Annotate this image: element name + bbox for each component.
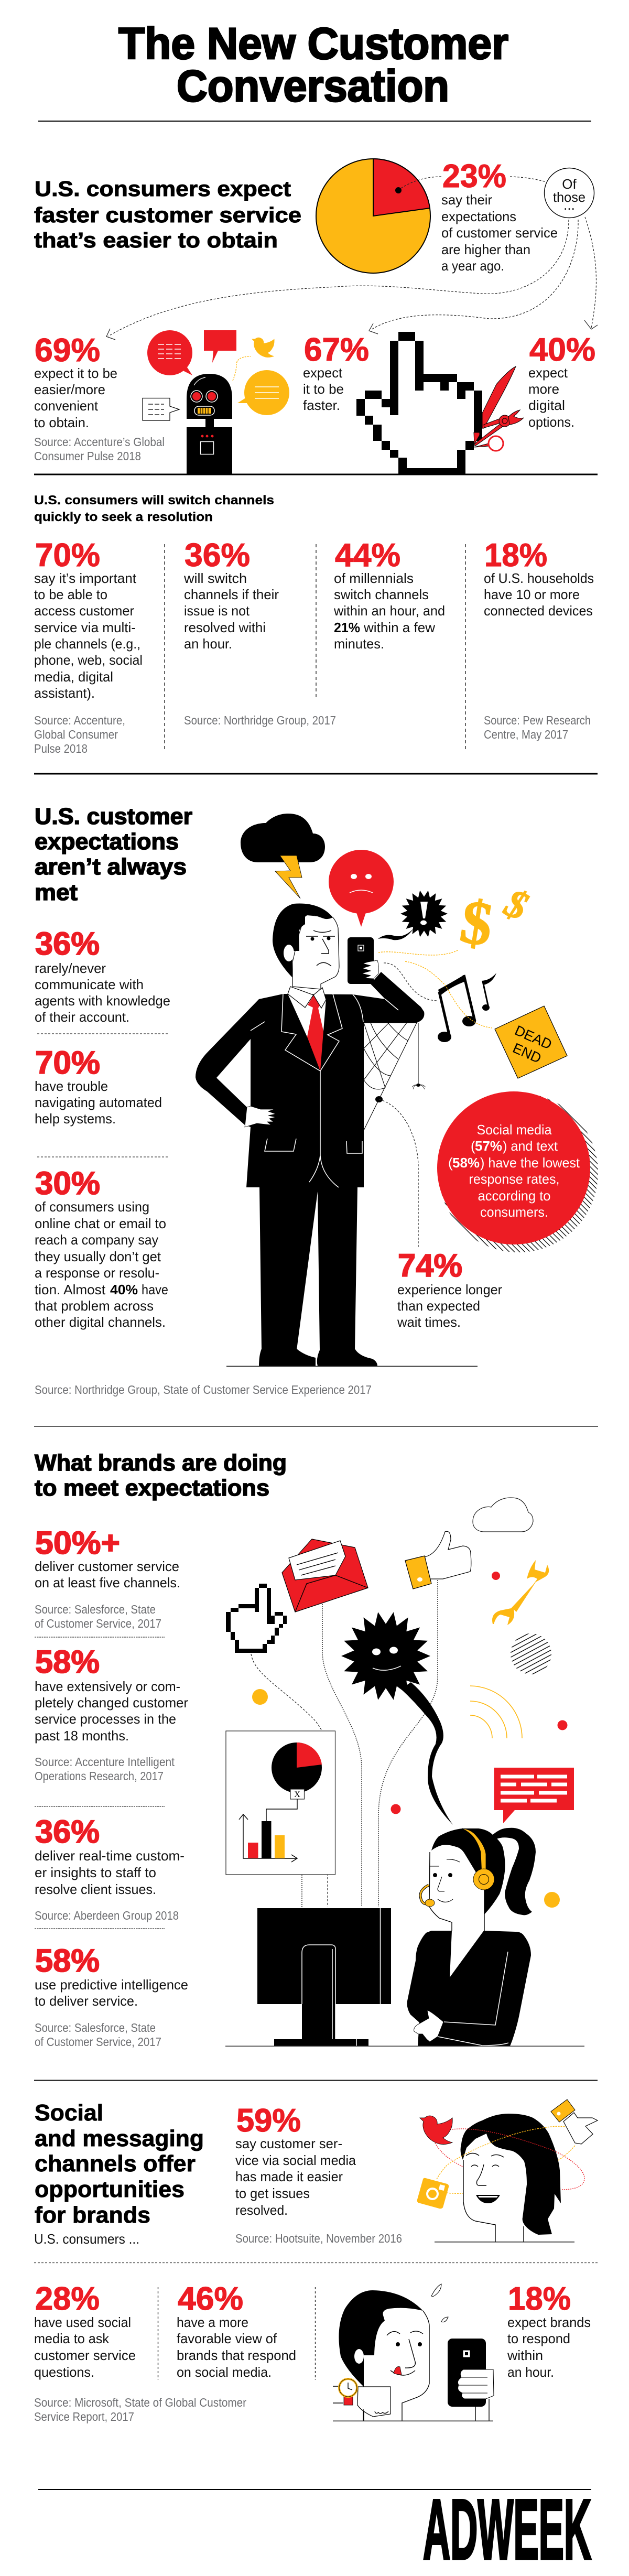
source: Northridge: Source: Northridge Group, State of Customer Service Experience 2017: [35, 1383, 372, 1397]
stat: 18 percent respond: [507, 2281, 591, 2380]
stat: 70 percent: service via multi-: [34, 620, 136, 635]
stat: 70 percent: [34, 537, 143, 755]
stat: 30 percent chat: they usually don’t get: [35, 1249, 161, 1264]
stat: 59 percent: to get issues: [235, 2185, 310, 2201]
stat: 69 percent: to obtain.: [34, 415, 89, 430]
callout: social media response rates: Social media: [477, 1122, 552, 1138]
title: The New Customer: [118, 19, 508, 68]
stat: 18 percent respond: within: [507, 2347, 543, 2363]
illustration: angry businessman: [196, 904, 424, 1366]
heading: social opportunities: U.S. consumers ...: [34, 2231, 139, 2247]
stat: 36 percent insights: deliver real-time custom-: [35, 1848, 185, 1864]
icon: outlined cloud: [473, 1498, 533, 1532]
stat: 30 percent chat: tion. Almost: [35, 1282, 106, 1297]
stat: 69 percent: convenient: [34, 398, 99, 414]
stat: 50 percent plus: of Customer Service, 2017: [35, 1617, 161, 1630]
stat: 58 percent predictive: use predictive intelligence: [35, 1977, 188, 1993]
stat: 59 percent: [235, 2103, 402, 2245]
stat: 18 percent: 18%: [484, 537, 547, 573]
callout: social media response rates: (: [448, 1155, 453, 1171]
chart card: pie and bars: X: [294, 1790, 300, 1799]
stat: 30 percent chat: of consumers using: [35, 1199, 149, 1215]
stat: 36 percent: issue is not: [184, 603, 250, 619]
stat: 44 percent: 44%: [335, 537, 400, 573]
icon: envelope: [282, 1539, 368, 1612]
stat: 58 percent changed: [35, 1644, 188, 1783]
callout: social media response rates: [437, 1091, 598, 1252]
heading: social opportunities: [34, 2100, 204, 2247]
icon: music notes: [438, 973, 496, 1042]
stat: 46 percent: have a more: [177, 2314, 248, 2330]
icon: pixel cursor hand: [356, 332, 482, 474]
stat: 36 percent insights: resolve client issues.: [35, 1881, 156, 1897]
stat: 70 percent: Global Consumer: [34, 728, 118, 741]
title: Conversation: [177, 61, 449, 111]
stat: 74 percent: than expected: [397, 1298, 480, 1314]
stat: 36 percent: [183, 537, 336, 727]
stat: 46 percent: [177, 2281, 296, 2380]
heading: social opportunities: channels offer: [35, 2151, 196, 2177]
stat: 40 percent: digital: [528, 397, 565, 413]
arrows: dotted illustration links: [378, 950, 492, 1028]
icon: phone in hand: [348, 937, 379, 984]
heading: switch channels: [34, 493, 274, 524]
stat: 23 percent: [441, 158, 558, 274]
stat: 36 percent rarely: rarely/never: [35, 960, 106, 976]
stat: 50 percent plus: deliver customer service: [35, 1558, 179, 1574]
stat: 40 percent: options.: [528, 414, 574, 430]
stat: 46 percent: favorable view of: [177, 2331, 277, 2346]
stat: 30 percent chat: reach a company say: [35, 1232, 158, 1248]
stat: 36 percent rarely: agents with knowledge: [35, 993, 170, 1009]
stat: 70 percent: access customer: [34, 603, 134, 619]
stat: 58 percent predictive: Source: Salesforce, State: [35, 2021, 156, 2034]
stat: 18 percent respond: to respond: [507, 2331, 570, 2346]
source: Microsoft: Source: Microsoft, State of Global Customer: [34, 2396, 246, 2409]
callout: social media response rates: ) and text: [503, 1138, 558, 1154]
panel: expectations not met: [35, 804, 598, 1397]
heading: faster customer service: faster customer service: [34, 203, 301, 227]
callout: of those: Of: [562, 176, 577, 192]
stat: 44 percent: 21%: [334, 620, 360, 635]
stat: 30 percent chat: have: [142, 1282, 168, 1297]
icon: smiling burst: [341, 1612, 453, 1825]
stat: 36 percent: resolved withi: [184, 620, 266, 635]
stat: 44 percent: [333, 537, 445, 652]
stat: 50 percent plus: [35, 1525, 180, 1630]
stat: 67 percent: it to be: [303, 381, 344, 397]
icon: wrench: [492, 1560, 549, 1625]
headset: [462, 1828, 486, 1875]
stat: 58 percent changed: Operations Research, 2017: [35, 1769, 164, 1783]
stat: 44 percent: minutes.: [334, 636, 384, 652]
features: [429, 1859, 460, 1902]
stat: 70 percent: to be able to: [34, 587, 107, 602]
stat: 59 percent: vice via social media: [235, 2152, 356, 2168]
icon: robot with speech bubbles: [143, 330, 289, 474]
stat: 28 percent: customer service: [34, 2347, 136, 2363]
stat: 58 percent predictive: of Customer Service, 2017: [35, 2035, 161, 2049]
arrows: dotted links to monitor: [251, 1580, 438, 1907]
illustration: man checking watch and phone: [333, 2284, 494, 2421]
stat: 59 percent: Source: Hootsuite, November 2016: [235, 2232, 402, 2245]
stat: 67 percent: expect: [303, 365, 343, 381]
stat: 18 percent: Centre, May 2017: [484, 728, 568, 741]
stat: 30 percent chat: a response or resolu-: [35, 1265, 159, 1281]
panel: what brands are doing: [35, 1450, 584, 2049]
icon: red speech bubble with lines: [494, 1768, 574, 1823]
hip hand: [245, 1106, 276, 1127]
stat: 44 percent: within an hour, and: [333, 603, 445, 619]
stat: 74 percent: experience longer: [397, 1282, 502, 1297]
stat: 28 percent: have used social: [34, 2314, 131, 2330]
stat: 70 percent: 70%: [35, 537, 100, 573]
stat: 70 percent: Source: Accenture,: [34, 713, 125, 727]
stat: 58 percent changed: Source: Accenture Intelligent: [35, 1755, 175, 1769]
stat: 59 percent: resolved.: [235, 2202, 288, 2218]
hair: [431, 1828, 505, 1914]
stat: 58 percent changed: have extensively or com-: [35, 1679, 180, 1694]
stat: 44 percent: within a few: [363, 620, 435, 635]
icon: dead end sign: [495, 1006, 567, 1078]
icon: sad face speech bubble: [329, 850, 394, 927]
stat: 50 percent plus: on at least five channels.: [35, 1575, 180, 1590]
stat: 58 percent changed: service processes in the: [35, 1711, 176, 1727]
stat: 70 percent trouble: 70%: [35, 1045, 100, 1080]
stat: 69 percent: [34, 332, 165, 463]
face: [429, 1840, 484, 1931]
stat: 23 percent: 23%: [442, 158, 506, 194]
arrows: dashed connectors: [106, 177, 598, 340]
stat: 18 percent: have 10 or more: [484, 587, 580, 602]
pie chart: 23 percent: [316, 159, 430, 273]
icon: spider web: [364, 1023, 426, 1248]
heading: expectations not met: expectations: [35, 829, 179, 854]
stat: 69 percent: Consumer Pulse 2018: [34, 449, 141, 463]
callout: social media response rates: (: [471, 1138, 475, 1154]
source: Microsoft: Service Report, 2017: [34, 2410, 134, 2423]
stat: 40 percent: more: [528, 381, 559, 397]
stat: 58 percent changed: pletely changed customer: [35, 1695, 188, 1711]
stat: 67 percent: [303, 332, 369, 413]
stat: 69 percent: 69%: [35, 332, 100, 369]
stat: 36 percent insights: [35, 1814, 185, 1922]
stat: 36 percent: Source: Northridge Group, 2017: [184, 713, 336, 727]
stat: 69 percent: expect it to be: [34, 365, 117, 381]
stat: 70 percent: media, digital: [34, 669, 113, 685]
stat: 58 percent predictive: 58%: [35, 1943, 100, 1978]
icon: thumbs up: [405, 1531, 471, 1589]
stat: 36 percent: channels if their: [184, 587, 279, 602]
stat: 69 percent: Source: Accenture’s Global: [34, 435, 165, 449]
stat: 58 percent changed: 58%: [35, 1644, 100, 1680]
stat: 74 percent: 74%: [398, 1248, 462, 1283]
stat: 28 percent: questions.: [34, 2364, 94, 2380]
icon: small pixel hand: [226, 1584, 287, 1653]
stat: 70 percent: Pulse 2018: [34, 742, 88, 755]
callout: social media response rates: 57%: [475, 1138, 502, 1154]
heading: expectations not met: [35, 804, 192, 905]
stat: 23 percent: expectations: [441, 209, 516, 224]
stat: 59 percent: say customer ser-: [235, 2136, 342, 2151]
stat: 18 percent respond: an hour.: [507, 2364, 554, 2380]
stat: 50 percent plus: Source: Salesforce, State: [35, 1603, 156, 1616]
stat: 74 percent: [397, 1248, 502, 1330]
callout: of those: [544, 168, 594, 218]
stat: 28 percent: [34, 2281, 136, 2380]
panel: social and messaging: [34, 2099, 598, 2423]
stat: 30 percent chat: other digital channels.: [35, 1314, 166, 1330]
stat: 36 percent rarely: 36%: [35, 926, 100, 961]
icon: dead end sign: DEAD: [513, 1022, 554, 1053]
stat: 36 percent rarely: communicate with: [35, 977, 144, 992]
heading: social opportunities: and messaging: [35, 2126, 204, 2151]
callout: of those: those: [553, 189, 585, 205]
stat: 23 percent: of customer service: [441, 225, 558, 241]
stat: 36 percent rarely: of their account.: [35, 1009, 129, 1025]
stat: 36 percent insights: Source: Aberdeen Group 2018: [35, 1909, 179, 1922]
stat: 70 percent trouble: help systems.: [35, 1111, 116, 1127]
stat: 36 percent insights: 36%: [35, 1814, 100, 1849]
stat: 70 percent trouble: have trouble: [35, 1078, 108, 1094]
shirt and tie: [288, 994, 326, 1037]
stat: 30 percent chat: 40%: [110, 1282, 138, 1297]
heading: social opportunities: Social: [35, 2100, 103, 2126]
heading: faster customer service: that’s easier to obtain: [34, 228, 278, 252]
jacket: [196, 972, 424, 1187]
stat: 50 percent plus: 50%+: [35, 1525, 120, 1561]
stat: 36 percent: an hour.: [184, 636, 232, 652]
heading: what brands are doing: What brands are doing: [35, 1450, 287, 1476]
hand: [414, 2010, 443, 2042]
stat: 18 percent respond: expect brands: [507, 2314, 591, 2330]
stat: 70 percent trouble: [35, 1045, 162, 1127]
body: [407, 1931, 531, 2046]
stat: 18 percent: [484, 537, 594, 741]
icon: desktop monitor: [257, 1908, 391, 2046]
heading: social opportunities: opportunities: [35, 2177, 185, 2202]
stat: 40 percent: expect: [528, 365, 568, 381]
stat: 30 percent chat: that problem across: [35, 1298, 154, 1314]
stat: 36 percent: 36%: [185, 537, 250, 573]
callout: social media response rates: ) have the lowest: [480, 1155, 580, 1171]
stat: 70 percent trouble: navigating automated: [35, 1095, 162, 1110]
stat: 70 percent: phone, web, social: [34, 652, 143, 668]
stat: 74 percent: wait times.: [397, 1314, 461, 1330]
stat: 18 percent: Source: Pew Research: [484, 713, 591, 727]
stat: 28 percent: 28%: [35, 2281, 100, 2317]
stat: 18 percent respond: 18%: [508, 2281, 571, 2317]
legs: [259, 1187, 357, 1350]
stat: 30 percent chat: [35, 1165, 168, 1330]
stat: 46 percent: brands that respond: [177, 2347, 296, 2363]
heading: expectations not met: met: [35, 880, 78, 905]
callout: social media response rates: response rates,: [469, 1171, 560, 1187]
heading: what brands are doing: to meet expectations: [35, 1475, 269, 1501]
stat: 36 percent rarely: [35, 926, 170, 1025]
stat: 58 percent changed: past 18 months.: [35, 1728, 129, 1744]
panel: switch channels: [34, 493, 594, 755]
icon: storm cloud: [241, 814, 325, 899]
source: Microsoft: [34, 2396, 246, 2423]
heading: switch channels: U.S. consumers will switch channels: [34, 493, 274, 507]
icon: dollar signs: [456, 880, 534, 959]
stat: 18 percent: of U.S. households: [484, 570, 594, 586]
stat: 23 percent: say their: [441, 192, 492, 208]
stat: 67 percent: 67%: [304, 332, 369, 368]
stat: 23 percent: a year ago.: [441, 258, 504, 274]
stat: 69 percent: easier/more: [34, 382, 105, 397]
stat: 70 percent: say it’s important: [34, 570, 137, 586]
callout: social media response rates: 58%: [452, 1155, 480, 1171]
heading: social opportunities: for brands: [35, 2202, 150, 2228]
decorative dots and signal arcs: [252, 1572, 567, 1908]
heading: faster customer service: U.S. consumers expect: [35, 177, 291, 201]
title: [118, 19, 508, 111]
stat: 67 percent: faster.: [303, 397, 340, 413]
stat: 46 percent: 46%: [178, 2281, 243, 2317]
callout: of those: ...: [563, 197, 575, 213]
heading: switch channels: quickly to seek a resolution: [34, 510, 213, 524]
icon: dollar signs: $: [498, 880, 534, 929]
stat: 70 percent: ple channels (e.g.,: [34, 636, 140, 652]
callout: social media response rates: according to: [478, 1188, 550, 1204]
head: [292, 915, 339, 989]
stat: 18 percent: connected devices: [484, 603, 593, 619]
heading: faster customer service: [34, 177, 301, 252]
stat: 36 percent insights: er insights to staff to: [35, 1865, 156, 1880]
stat: 40 percent: [528, 332, 595, 430]
stat: 44 percent: switch channels: [334, 587, 429, 602]
ponytail: [493, 1828, 536, 1915]
stat: 40 percent: 40%: [529, 332, 595, 368]
stat: 36 percent: will switch: [183, 570, 247, 586]
heading: expectations not met: U.S. customer: [35, 804, 192, 829]
chart card: pie and bars: [226, 1731, 335, 1908]
stat: 23 percent: are higher than: [441, 242, 530, 257]
heading: what brands are doing: [35, 1450, 287, 1501]
stat: 46 percent: on social media.: [177, 2364, 272, 2380]
callout: social media response rates: consumers.: [480, 1204, 548, 1220]
stat: 59 percent: has made it easier: [235, 2169, 343, 2184]
illustration: support agent with headset: [407, 1828, 536, 2046]
stat: 59 percent: 59%: [236, 2103, 301, 2139]
stat: 30 percent chat: online chat or email to: [35, 1216, 166, 1231]
stat: 44 percent: of millennials: [334, 570, 414, 586]
stat: 28 percent: media to ask: [34, 2331, 110, 2346]
heading: expectations not met: aren’t always: [35, 854, 187, 880]
stat: 58 percent predictive: to deliver service.: [35, 1993, 138, 2009]
icon: dead end sign: END: [511, 1040, 544, 1066]
stat: 30 percent chat: 30%: [35, 1165, 100, 1201]
icon: exclamation burst: [378, 891, 448, 940]
stat: 58 percent predictive: [35, 1943, 188, 2049]
stat: 70 percent: assistant).: [34, 685, 95, 701]
panel: expectations intro: [34, 158, 598, 474]
illustration: woman with social icons: [417, 2099, 598, 2243]
icon: red swiss army tools: [474, 366, 524, 451]
icon: dollar signs: $: [456, 886, 497, 959]
